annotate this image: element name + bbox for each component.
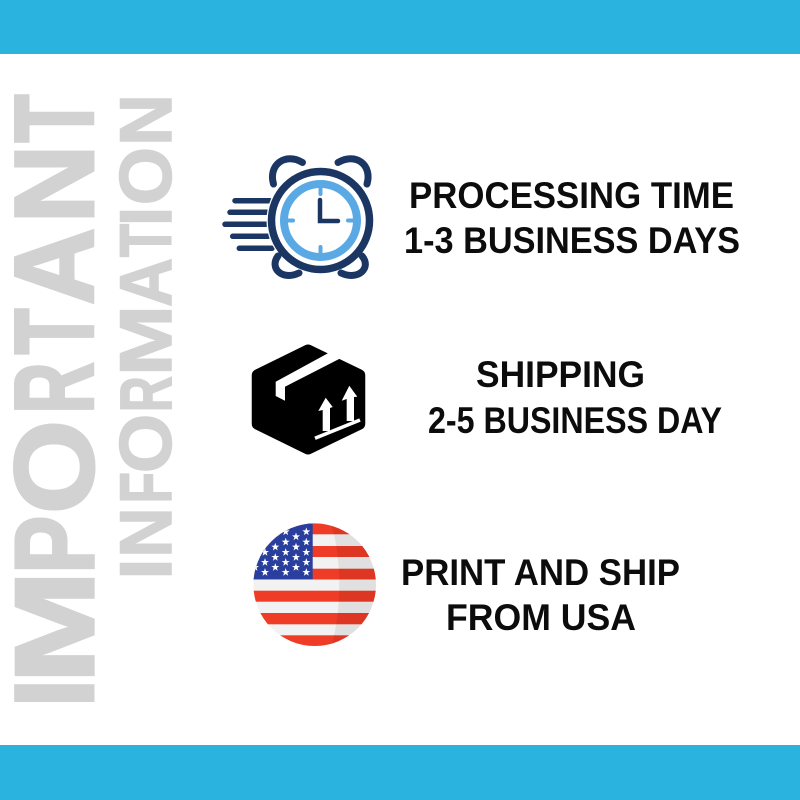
- icon: fast alarm clock: [225, 159, 374, 275]
- heading word: information: R: [106, 376, 187, 412]
- bottom banner: [0, 745, 800, 800]
- label: print and ship from usa: FROM USA: [446, 597, 636, 638]
- label: print and ship from usa: [401, 552, 680, 638]
- label: shipping: [428, 354, 722, 441]
- heading word: information: I: [106, 558, 187, 580]
- label: processing time: PROCESSING TIME: [409, 175, 734, 216]
- heading word: information: N: [106, 94, 187, 146]
- heading word: information: M: [106, 305, 187, 376]
- panel: shipping: [258, 350, 722, 448]
- label: shipping: SHIPPING: [476, 354, 645, 395]
- heading: important information: [0, 94, 187, 708]
- label: processing time: 1-3 BUSINESS DAYS: [404, 220, 740, 261]
- heading word: information: O: [106, 414, 187, 473]
- label: processing time: [404, 175, 740, 261]
- panel: processing time: [225, 159, 740, 275]
- icon: package box: [258, 350, 360, 448]
- label: shipping: 2-5 BUSINESS DAY: [428, 400, 722, 441]
- label: print and ship from usa: PRINT AND SHIP: [401, 552, 680, 593]
- heading word: information: T: [106, 224, 187, 257]
- heading word: information: A: [106, 258, 187, 307]
- panel: origin: [250, 520, 680, 650]
- heading word: information: I: [106, 207, 187, 226]
- heading word: information: O: [106, 147, 187, 205]
- heading word: information: N: [106, 507, 187, 558]
- heading word: information: F: [106, 472, 187, 503]
- icon: usa flag: [254, 523, 376, 646]
- top banner: [0, 0, 800, 54]
